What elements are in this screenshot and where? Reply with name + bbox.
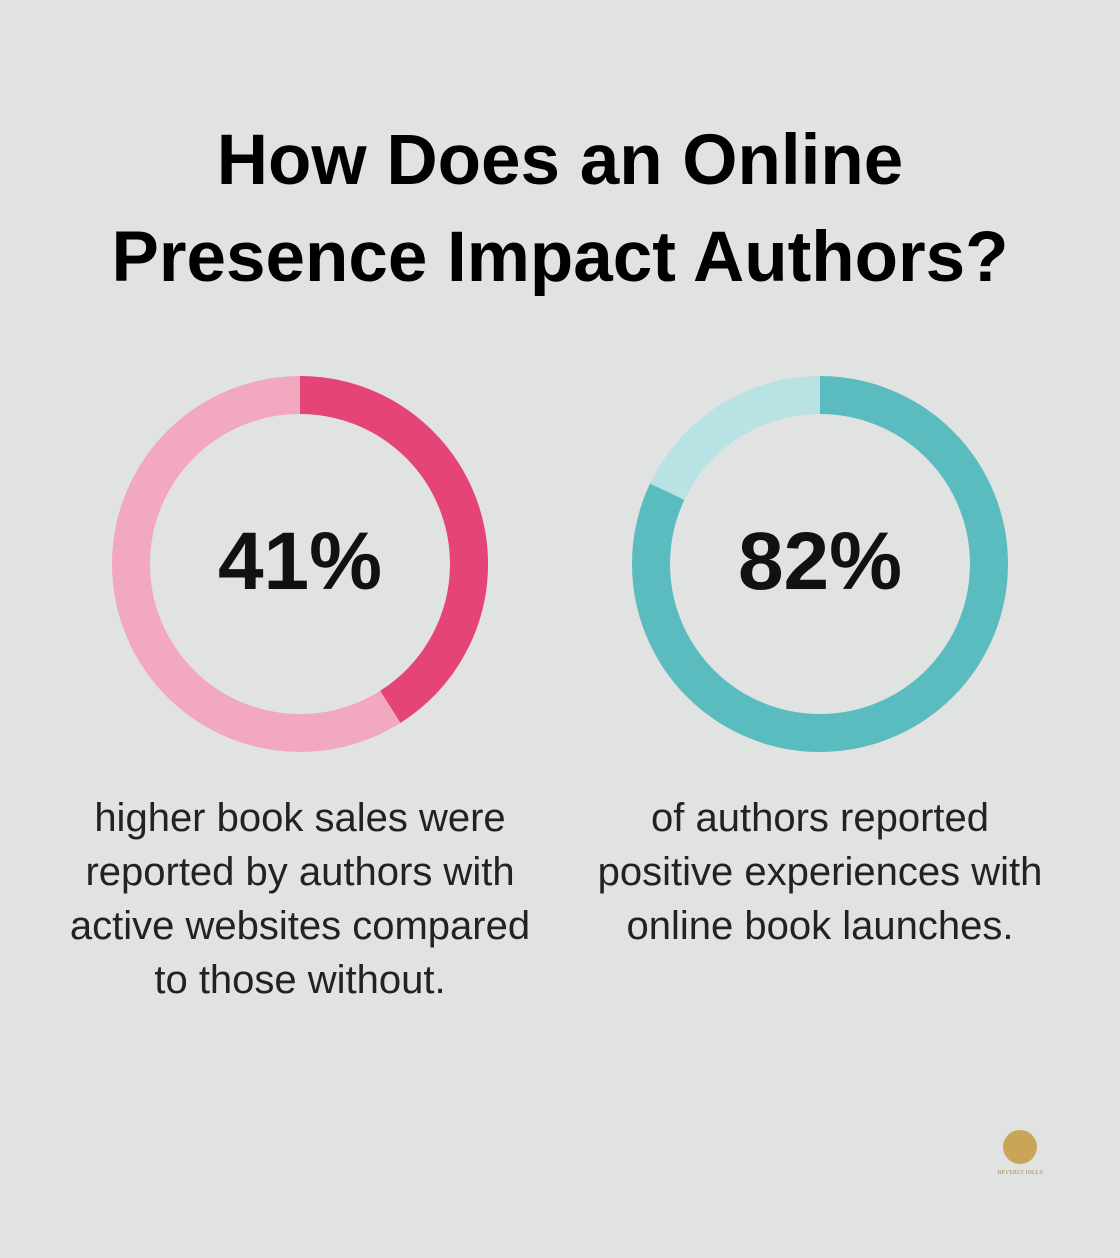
donut chart: 41% bbox=[112, 376, 488, 752]
description: 41%: higher book sales were bbox=[94, 796, 506, 840]
description: 82%: positive experiences with bbox=[598, 850, 1042, 894]
description: 41%: reported by authors with bbox=[85, 850, 515, 894]
description: 82%: online book launches. bbox=[627, 904, 1013, 948]
title: Presence Impact Authors? bbox=[112, 218, 1008, 297]
logo: Beverly Hills Publishing: BEVERLY HILLS bbox=[997, 1170, 1043, 1176]
description: 82%: of authors reported bbox=[651, 796, 989, 840]
title: How Does an Online bbox=[217, 121, 903, 200]
donut chart: 82% bbox=[632, 376, 1008, 752]
description: 41%: active websites compared bbox=[70, 904, 530, 948]
description: 41%: to those without. bbox=[154, 958, 446, 1002]
title bbox=[112, 121, 1008, 297]
stat: 41%: 41% bbox=[218, 516, 382, 607]
logo: Beverly Hills Publishing bbox=[997, 1130, 1043, 1176]
stat: 82%: 82% bbox=[738, 516, 902, 607]
description: 41% bbox=[70, 796, 530, 1002]
description: 82% bbox=[598, 796, 1042, 948]
